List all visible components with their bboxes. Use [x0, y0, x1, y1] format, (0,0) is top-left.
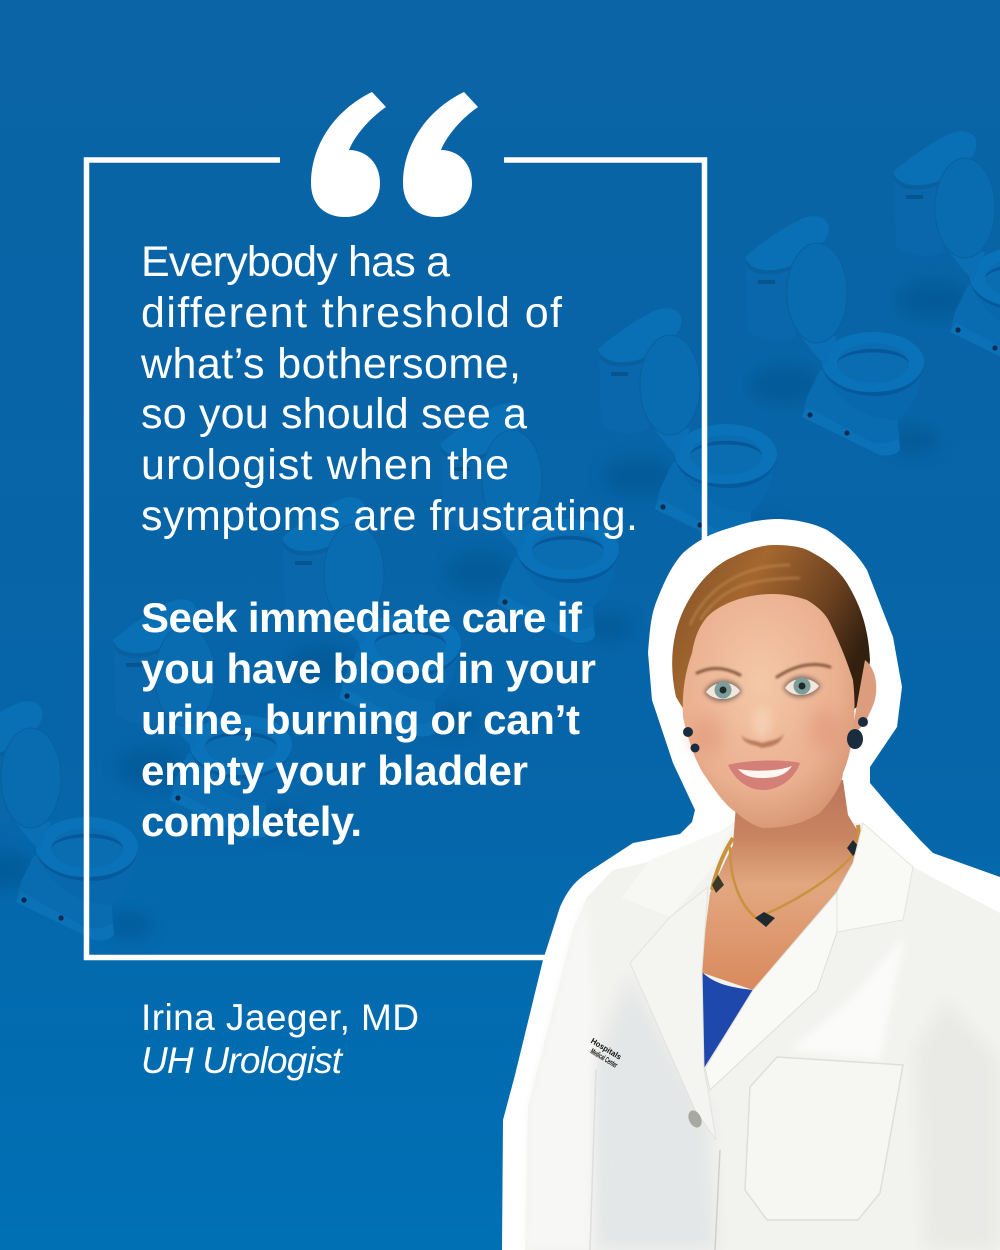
lab coat — [525, 823, 1000, 1250]
mouth — [728, 761, 800, 790]
hair highlights — [690, 565, 800, 625]
cheek blush — [691, 708, 841, 755]
attribution: UH Urologist — [141, 1040, 344, 1081]
attribution: Irina Jaeger, MD — [141, 997, 419, 1038]
quote text: different threshold of — [141, 289, 563, 337]
hair — [672, 545, 870, 720]
right lapel — [705, 892, 837, 1090]
bold advice text: completely. — [141, 798, 362, 845]
icon: quotation marks — [311, 92, 478, 217]
left collar — [622, 826, 733, 917]
eyebrows — [697, 665, 830, 677]
neck and chest — [700, 780, 860, 990]
bold advice text: Seek immediate care if — [141, 594, 583, 641]
attribution — [141, 997, 419, 1081]
right collar — [837, 823, 913, 932]
blue top — [702, 972, 753, 1068]
bold advice text — [141, 594, 596, 845]
face — [683, 594, 855, 828]
embroidery: Medical Center — [589, 1047, 619, 1070]
quote text: symptoms are frustrating. — [141, 492, 638, 540]
portrait white outline — [502, 519, 1000, 1250]
nose — [741, 706, 784, 748]
quote text: urologist when the — [141, 441, 509, 489]
necklace — [712, 825, 860, 927]
quote frame — [86, 160, 704, 958]
left lapel — [630, 887, 716, 1140]
embroidery: Hospitals — [589, 1036, 623, 1062]
embroidery — [585, 1036, 624, 1070]
coat shading — [525, 897, 1000, 1250]
right ear — [852, 660, 876, 732]
bold advice text: urine, burning or can’t — [141, 696, 580, 743]
toilets background pattern — [0, 131, 1000, 941]
right eye — [783, 676, 821, 698]
quote text: Everybody has a — [141, 238, 450, 286]
quote text: so you should see a — [141, 390, 527, 438]
quote text: what’s bothersome, — [140, 340, 521, 388]
bold advice text: you have blood in your — [141, 645, 596, 692]
button — [686, 1108, 704, 1130]
pocket — [745, 1057, 903, 1220]
earrings — [683, 717, 868, 752]
quote text — [140, 238, 638, 540]
left eye — [704, 680, 742, 702]
portrait: doctor — [502, 519, 1000, 1250]
bold advice text: empty your bladder — [141, 747, 528, 794]
